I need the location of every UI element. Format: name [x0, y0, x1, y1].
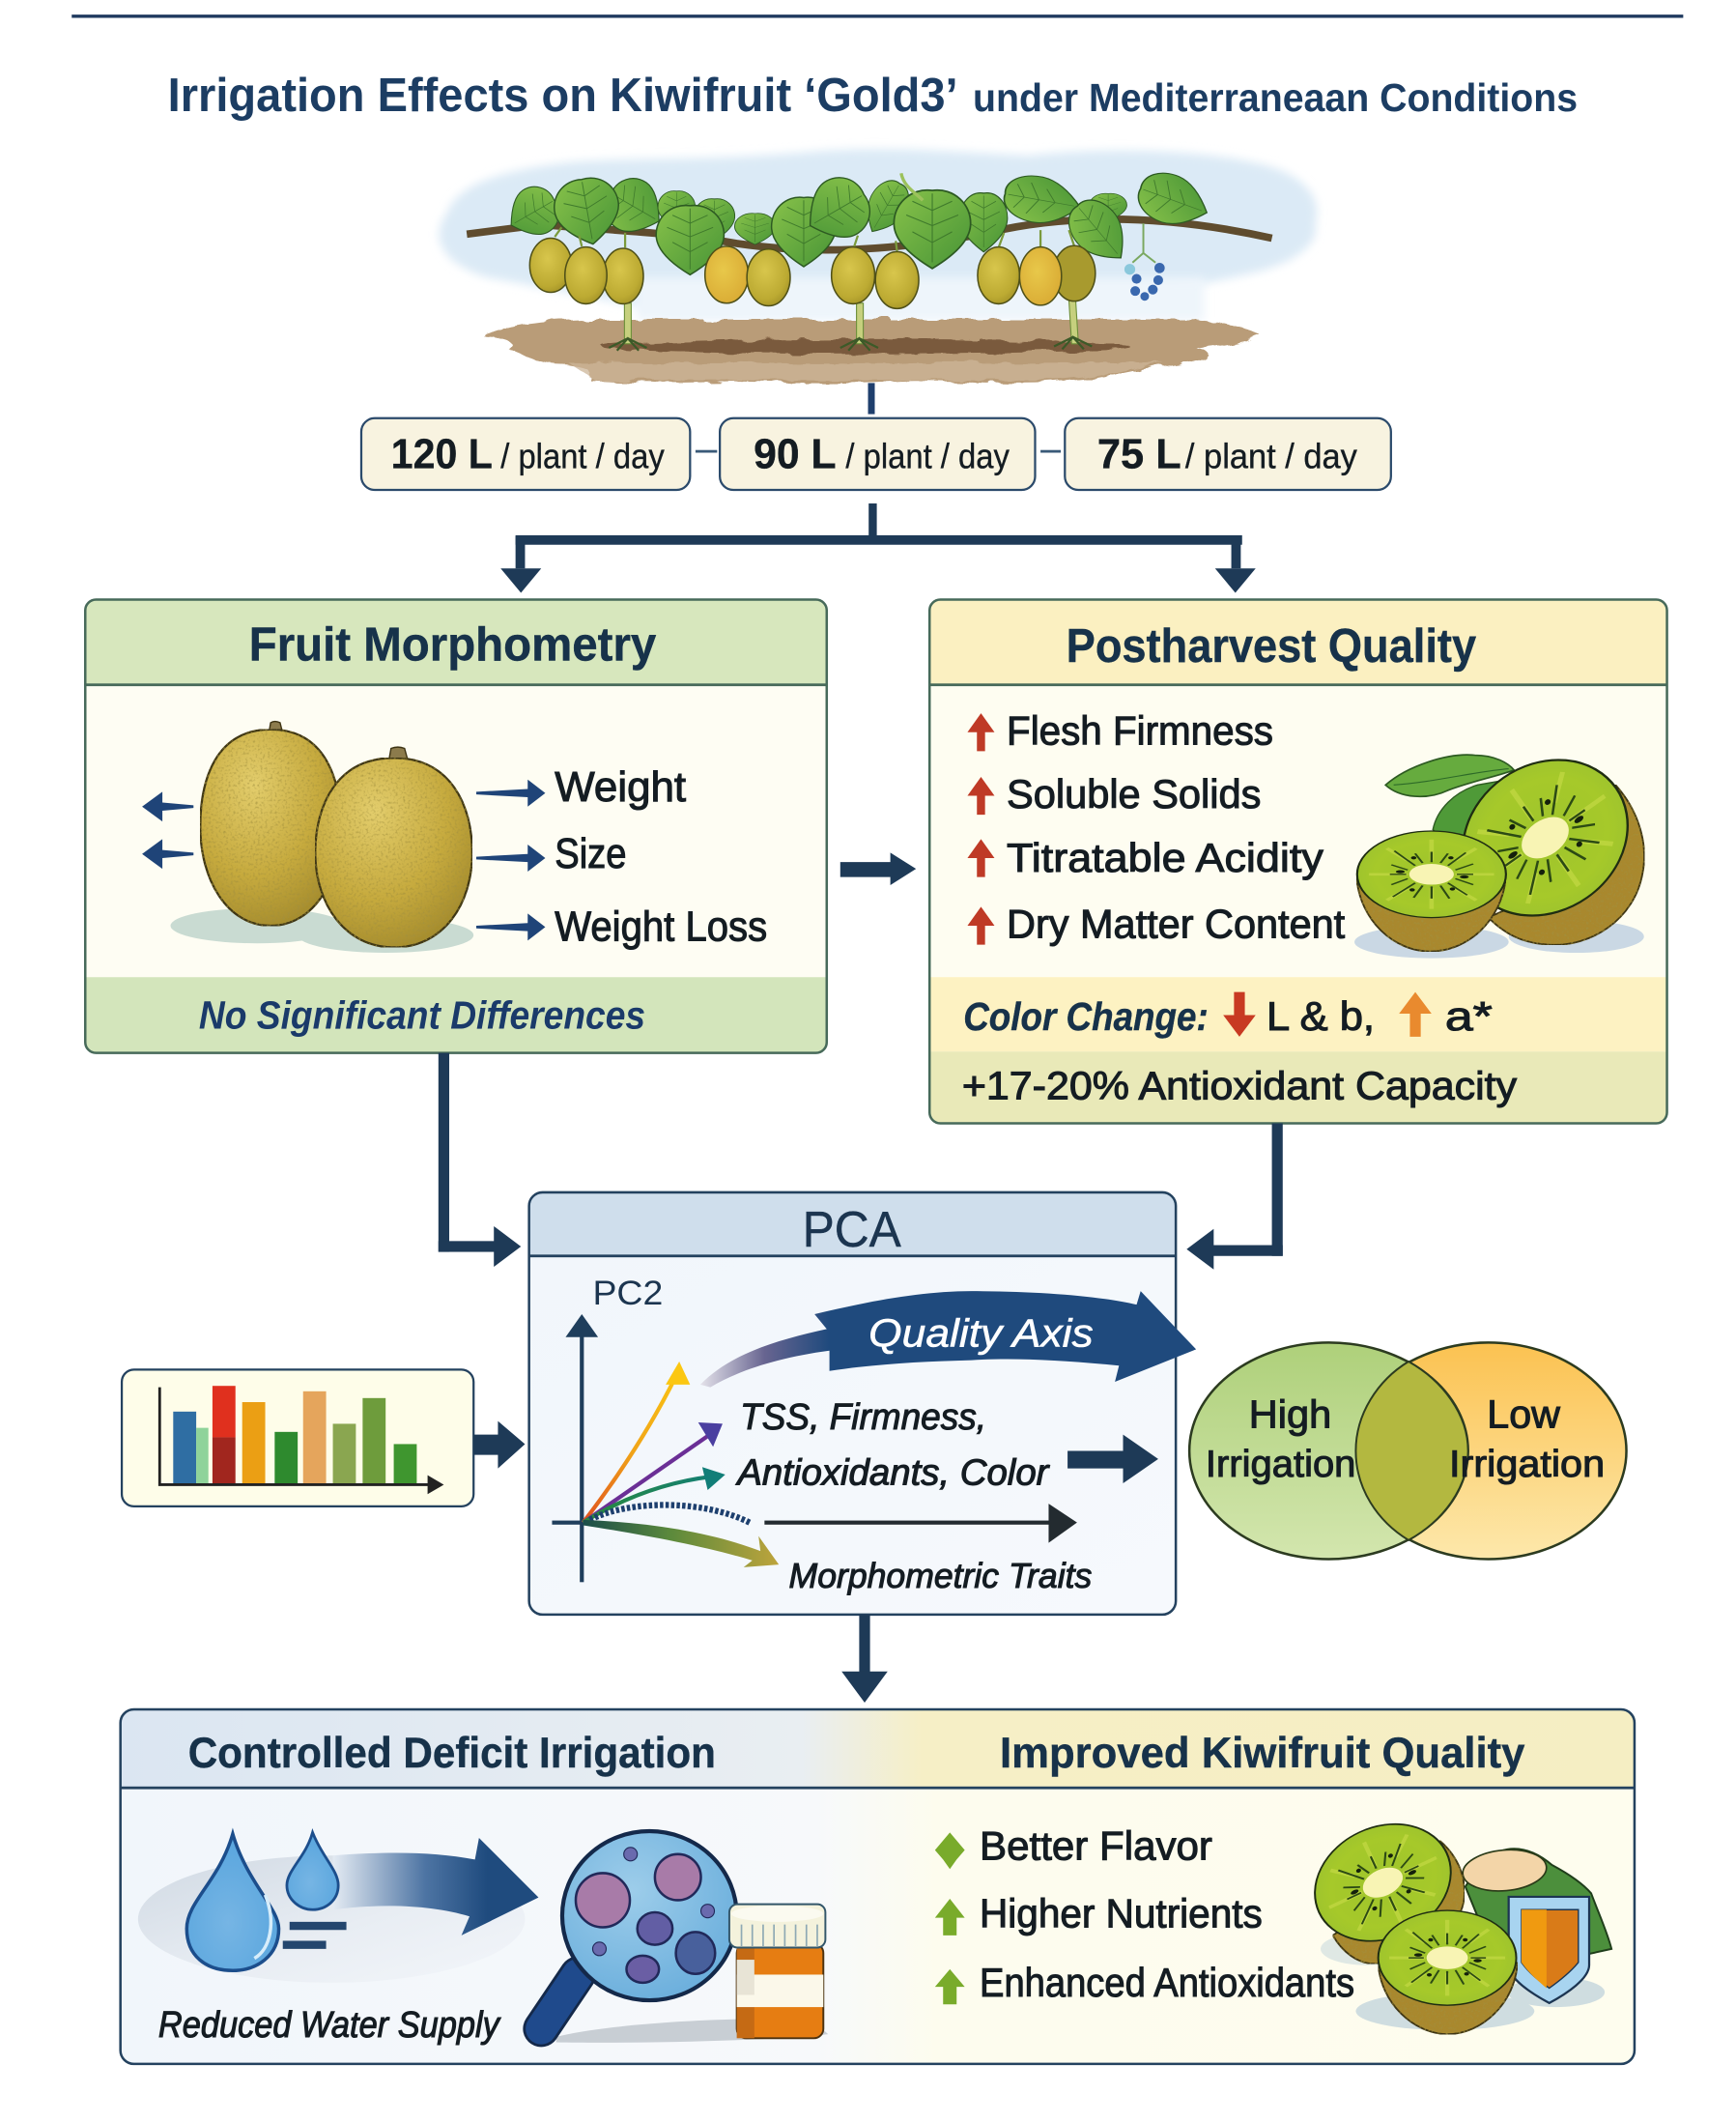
color change row: Color Change: — [963, 994, 1209, 1039]
heading: improved kiwifruit quality: Improved Kiwifruit Quality — [1000, 1729, 1525, 1777]
icon: cut kiwifruit — [1354, 729, 1658, 959]
dose: 90 L: / plant / day — [845, 437, 1010, 476]
arrow: quality axis — [700, 1291, 1196, 1388]
heading: controlled deficit irrigation: Controlled Deficit Irrigation — [188, 1729, 716, 1777]
venn diagram: high and low irrigation: High — [1249, 1392, 1331, 1437]
arrow: chart to PCA — [473, 1421, 525, 1469]
quality traits list: Titratable Acidity — [1007, 835, 1323, 880]
icon: pill bottle — [729, 1905, 825, 2038]
benefits list: Enhanced Antioxidants — [980, 1960, 1354, 2005]
antioxidant capacity row: +17-20% Antioxidant Capacity — [962, 1063, 1518, 1107]
icon: kiwifruit with shield — [1295, 1802, 1611, 2034]
benefits list — [980, 1822, 1354, 2005]
arrow: morphometry to postharvest — [840, 852, 916, 885]
icon: two whole kiwifruit — [170, 722, 473, 953]
title: under Mediterraneaan Conditions — [973, 75, 1578, 120]
trait vector labels: Antioxidants, Color — [735, 1452, 1050, 1493]
panel: conclusion — [121, 1709, 1635, 2064]
dose: 75 L: 75 L — [1097, 432, 1181, 478]
quality traits list: Flesh Firmness — [1007, 707, 1273, 753]
arrows: right of kiwifruit — [476, 780, 545, 940]
heading: PCA: PCA — [803, 1201, 901, 1257]
icon: magnifier with cells — [541, 1831, 828, 2043]
arrow: morphometry to PCA — [439, 1053, 521, 1267]
connector: vine to doses — [868, 383, 875, 415]
color change row — [963, 992, 1493, 1039]
color change row: L & b, — [1266, 993, 1375, 1039]
dose: 120 L — [361, 418, 690, 490]
icons: red up arrows — [967, 713, 994, 945]
arrow: PCA to venn — [1067, 1435, 1158, 1483]
heading: postharvest quality: Postharvest Quality — [1067, 620, 1476, 673]
venn diagram: high and low irrigation: Irrigation — [1206, 1444, 1355, 1485]
dose: 75 L: / plant / day — [1185, 437, 1358, 476]
trait labels: Weight Loss — [555, 903, 767, 950]
PCA biplot: PC2 — [592, 1275, 663, 1312]
panel: fruit morphometry — [85, 599, 827, 1053]
benefits list: Higher Nutrients — [980, 1890, 1263, 1936]
panel: postharvest quality — [929, 599, 1667, 1123]
result: no significant differences: No Significant Differences — [199, 992, 645, 1037]
venn diagram: high and low irrigation: Low — [1487, 1392, 1561, 1437]
quality traits list: Soluble Solids — [1007, 771, 1261, 817]
icon: reduced water supply — [138, 1832, 538, 1983]
illustration: kiwi vines over soil — [440, 149, 1317, 384]
trait vector labels: TSS, Firmness, — [740, 1397, 986, 1438]
dose: 75 L — [1065, 418, 1391, 490]
benefits list: Better Flavor — [980, 1822, 1212, 1868]
venn diagram: high and low irrigation — [1189, 1342, 1627, 1559]
color change row: a* — [1445, 993, 1493, 1039]
dose: 90 L — [720, 418, 1035, 490]
title: Irrigation Effects on Kiwifruit ‘Gold3’ — [168, 70, 958, 122]
trait vector labels: Morphometric Traits — [789, 1556, 1092, 1595]
bar chart card — [122, 1369, 473, 1506]
quality traits list: Dry Matter Content — [1007, 902, 1346, 947]
title — [168, 70, 1578, 122]
trait labels: Weight — [555, 764, 686, 811]
PCA biplot — [552, 1275, 1077, 1582]
irrigation dose boxes — [361, 418, 1391, 490]
arrow: PCA to conclusion — [841, 1615, 888, 1703]
quality traits list — [1007, 707, 1346, 947]
icons: green up arrows — [935, 1832, 965, 2004]
dose: 120 L: / plant / day — [500, 437, 665, 476]
panel: PCA — [529, 1192, 1176, 1615]
dose: 120 L: 120 L — [391, 432, 493, 478]
arrow: quality axis: Quality Axis — [868, 1311, 1094, 1356]
trait labels — [555, 764, 767, 950]
trait labels: Size — [555, 831, 626, 877]
venn diagram: high and low irrigation: Irrigation — [1449, 1444, 1605, 1485]
arrows: left of kiwifruit — [142, 791, 193, 869]
arrow: doses split to both panels — [500, 503, 1256, 592]
dose: 90 L: 90 L — [754, 432, 837, 478]
trait vector labels — [735, 1397, 1092, 1595]
heading: fruit morphometry: Fruit Morphometry — [249, 618, 656, 671]
arrow: postharvest to PCA — [1186, 1123, 1283, 1270]
label: reduced water supply: Reduced Water Supply — [158, 2005, 501, 2046]
